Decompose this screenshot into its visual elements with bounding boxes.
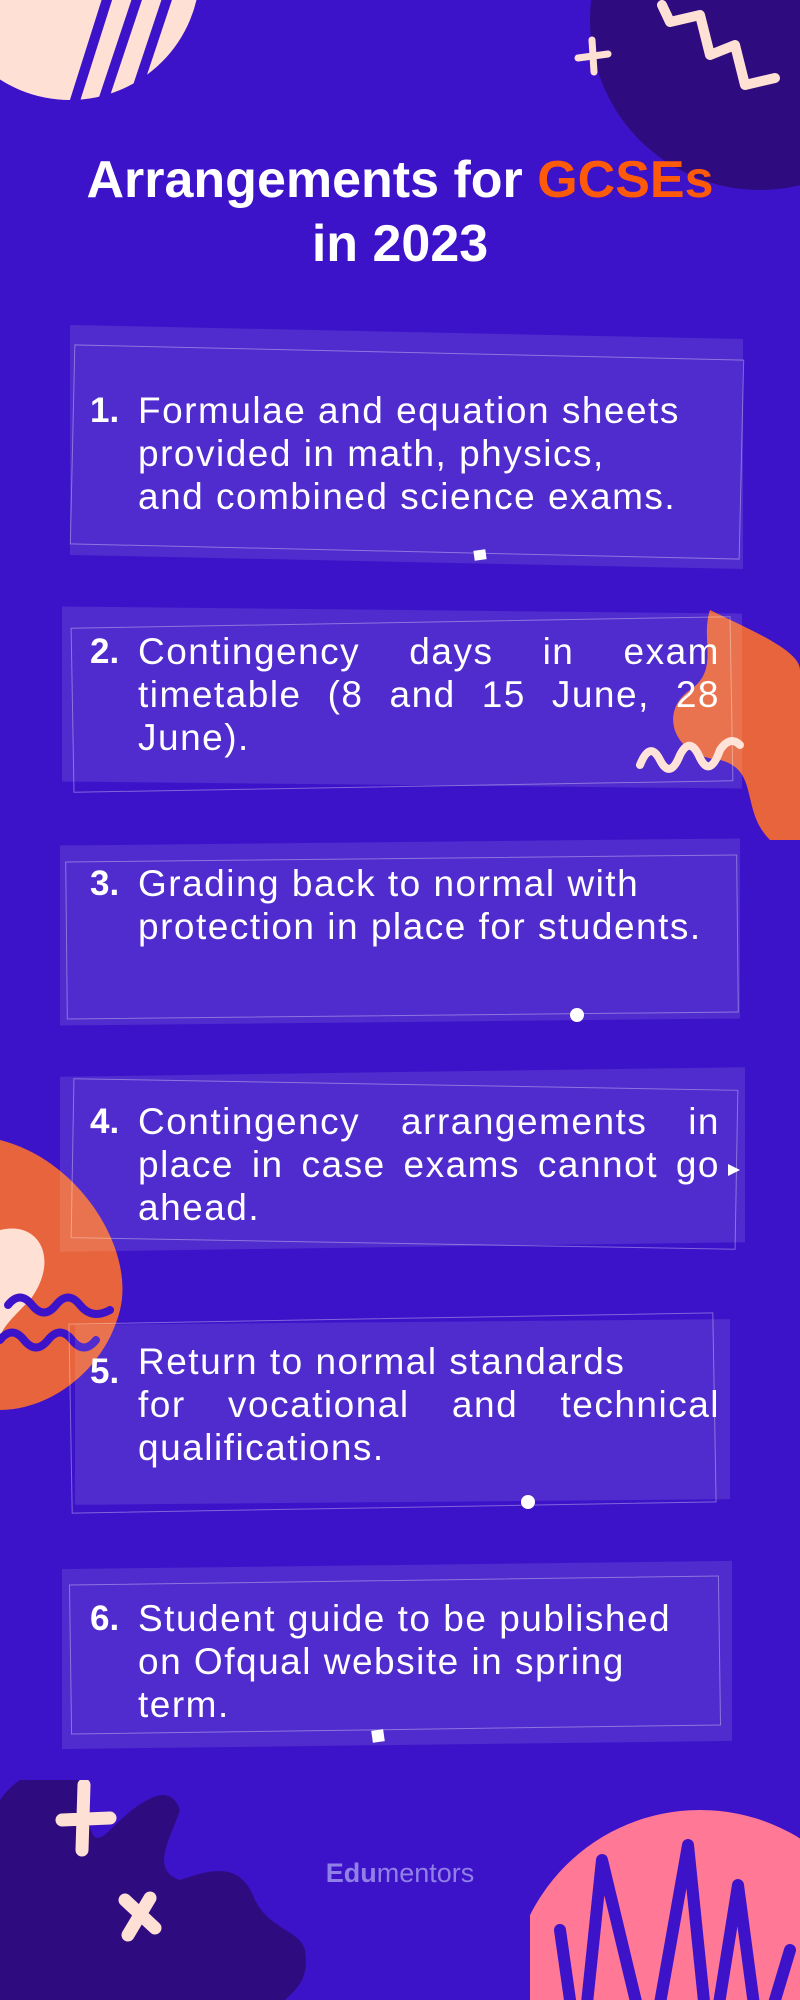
- text: item 4: Contingency arrangements in place in case exams cannot go ahead.: [138, 1101, 720, 1228]
- text: item 6: on Ofqual website in spring: [138, 1641, 625, 1682]
- text: item 5: Return to normal standards: [138, 1341, 625, 1382]
- marker: [473, 549, 487, 561]
- title: in 2023: [312, 215, 488, 273]
- text: item 5: 5.: [90, 1352, 119, 1391]
- decoration: orange blob right: [636, 610, 800, 840]
- decoration: top-right dark circle with zigzag: [574, 0, 800, 190]
- panel 5: [68, 1312, 730, 1514]
- marker: [371, 1729, 385, 1743]
- text: item 4: 4.: [90, 1102, 119, 1141]
- decoration: orange circle left: [0, 1140, 122, 1410]
- text: item 1: and combined science exams.: [138, 476, 676, 517]
- text: item 1: provided in math, physics,: [138, 433, 605, 474]
- text: item 3: [90, 863, 702, 947]
- panel 4: [60, 1067, 745, 1252]
- text: item 1: 1.: [90, 391, 119, 430]
- text: item 6: term.: [138, 1684, 230, 1725]
- marker: [521, 1495, 535, 1509]
- panel 6: [62, 1561, 732, 1749]
- text: item 5: [90, 1341, 720, 1468]
- text: item 5: for vocational and technical qualifications.: [138, 1384, 720, 1468]
- title: [86, 151, 714, 273]
- text: item 6: 6.: [90, 1599, 119, 1638]
- text: item 2: Contingency days in exam timetable (8 and 15 June, 28 June).: [138, 631, 720, 758]
- panel 3: [60, 838, 740, 1026]
- panel 2: [62, 606, 742, 793]
- marker: [728, 1164, 740, 1176]
- text: item 6: Student guide to be published: [138, 1598, 671, 1639]
- text: item 6: [90, 1598, 671, 1725]
- logo: Edumentors: [326, 1858, 474, 1888]
- decoration: top-left peach circle: [0, 0, 196, 100]
- text: item 3: Grading back to normal with: [138, 863, 639, 904]
- marker: [570, 1008, 584, 1022]
- text: item 2: 2.: [90, 632, 119, 671]
- text: item 3: 3.: [90, 864, 119, 903]
- decoration: bottom-right pink circle with zigzag: [530, 1810, 800, 2000]
- decoration: bottom-left dark blob with plus and cross: [0, 1780, 306, 2000]
- text: item 1: [90, 390, 680, 517]
- text: item 3: protection in place for students.: [138, 906, 702, 947]
- title: Arrangements for GCSEs: [86, 151, 714, 209]
- panel 1: [70, 325, 744, 569]
- text: item 1: Formulae and equation sheets: [138, 390, 680, 431]
